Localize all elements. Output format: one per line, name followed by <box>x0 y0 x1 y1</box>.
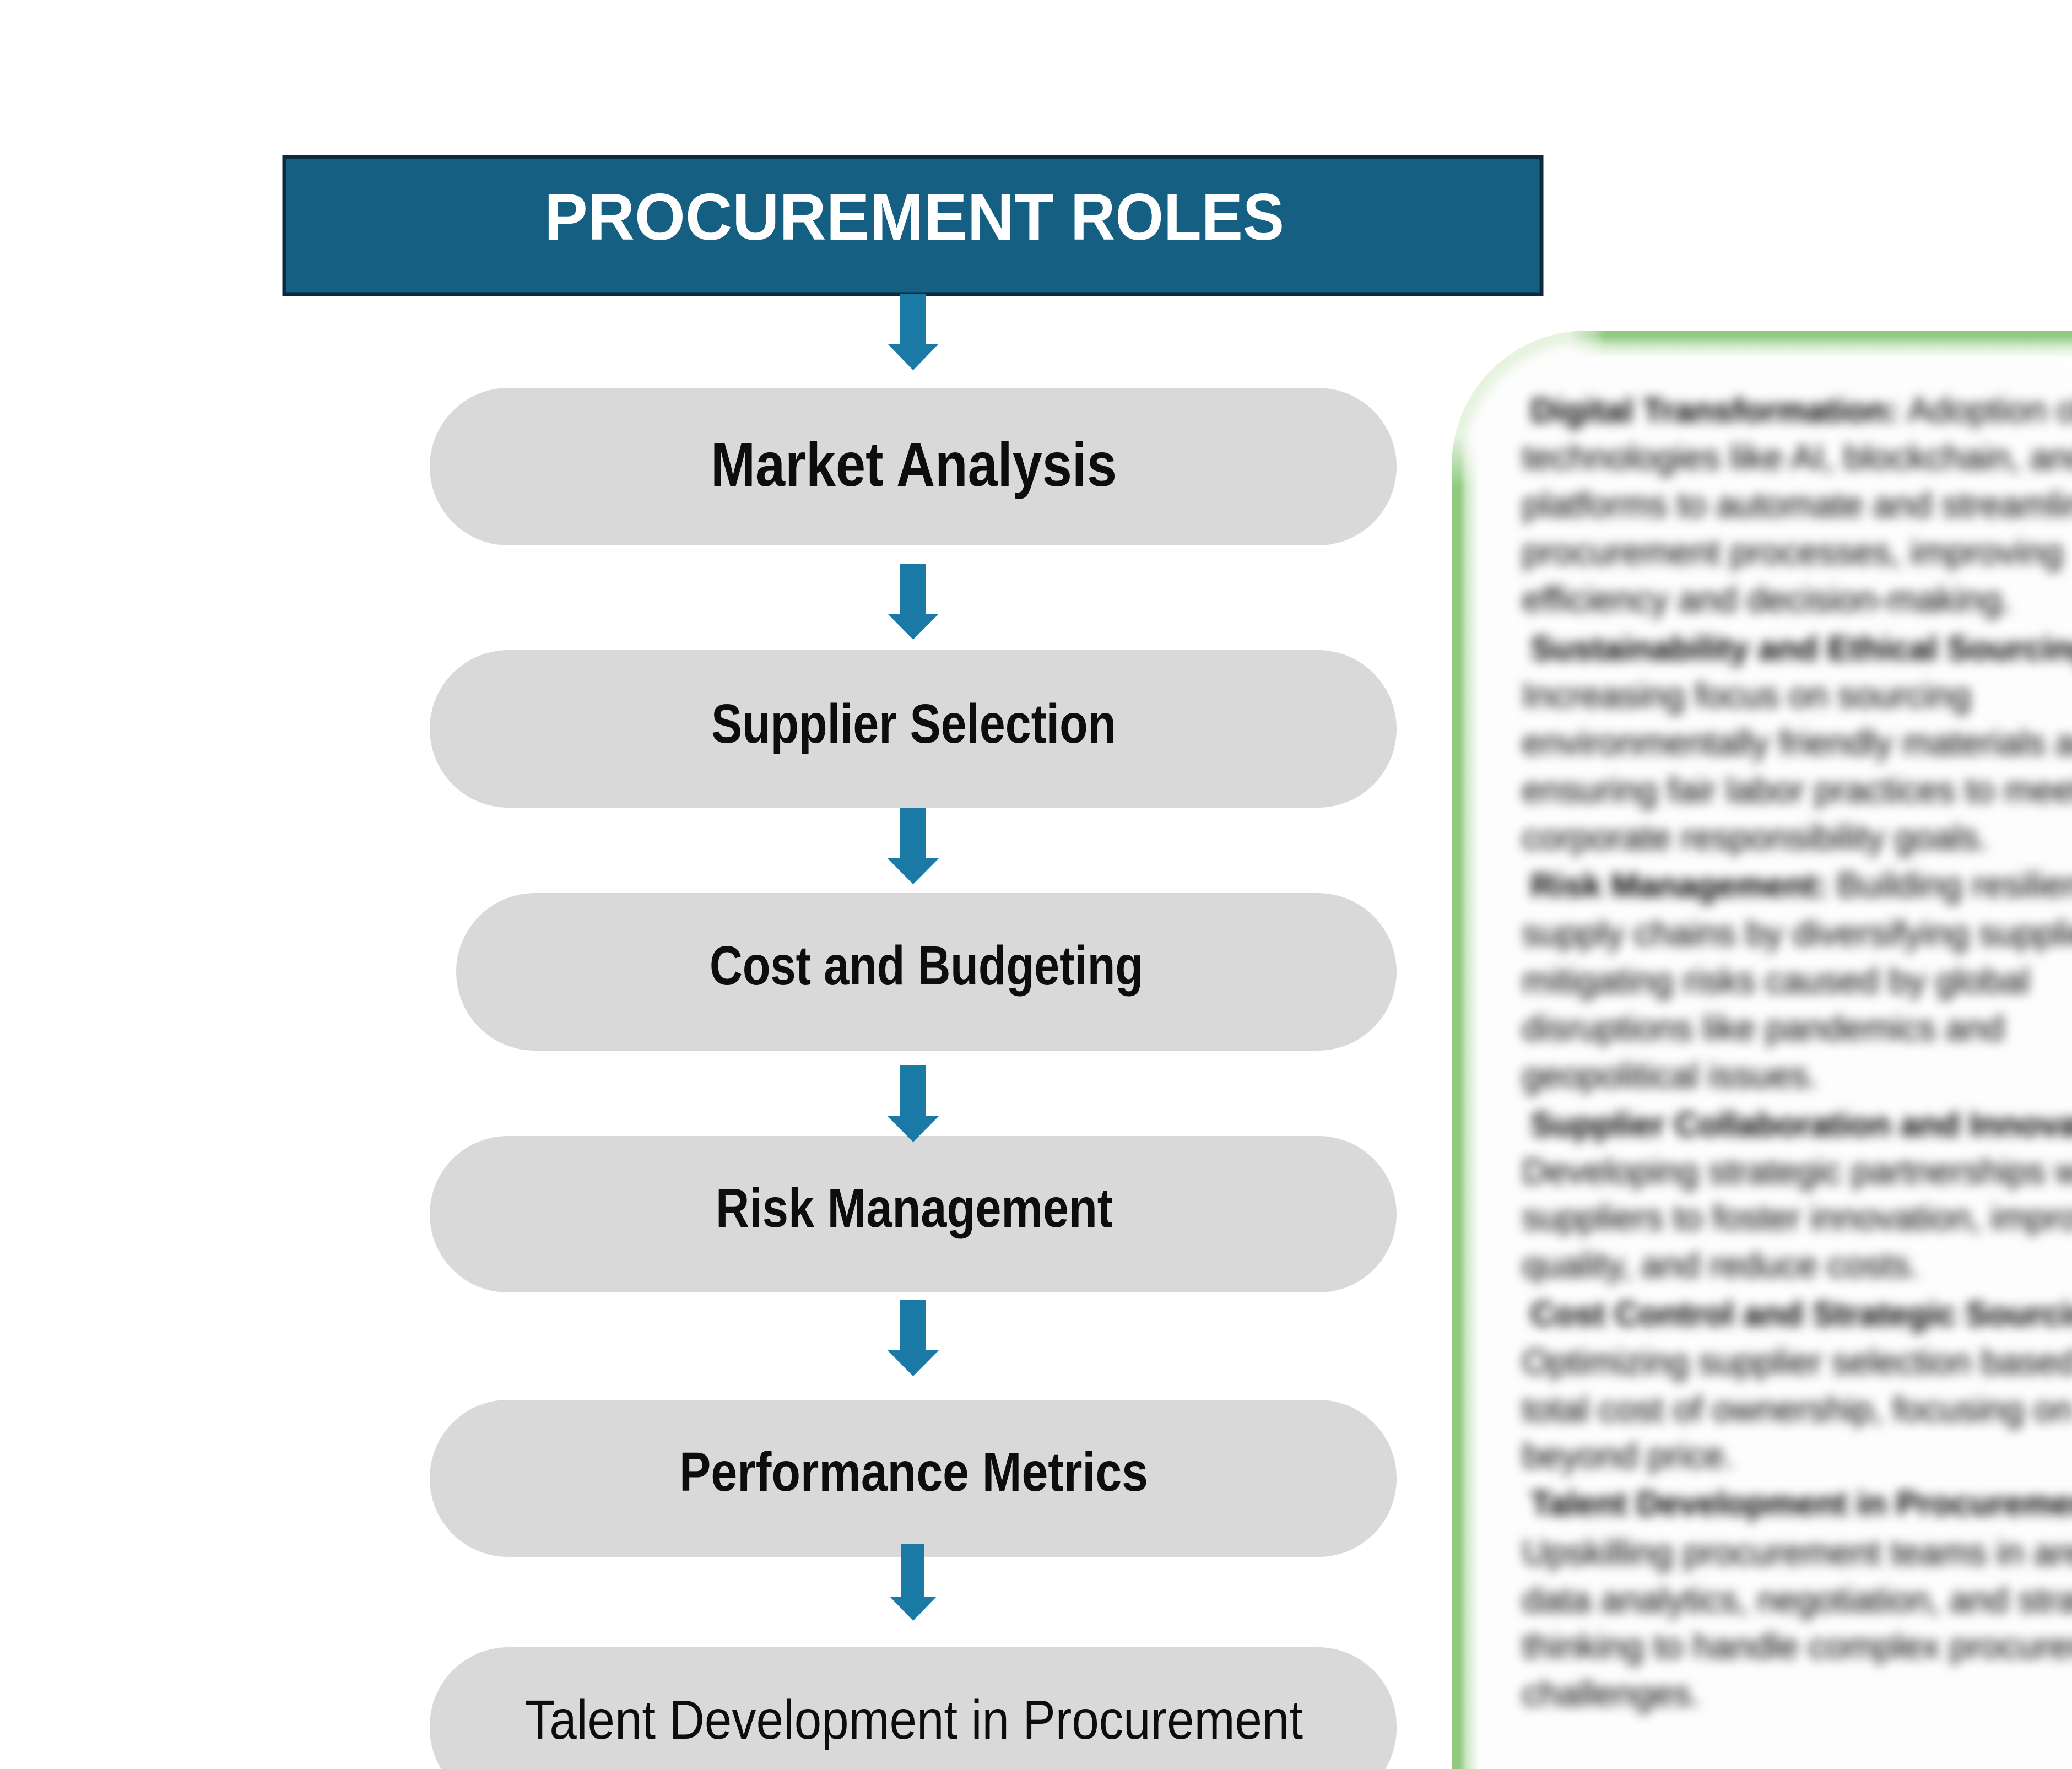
blurred body text: disruptions like pandemics and <box>1522 1008 2004 1048</box>
step pill: Risk Management: Risk Management <box>716 1177 1113 1239</box>
title banner <box>284 157 1541 294</box>
title banner: PROCUREMENT <box>544 180 1054 254</box>
arrow: risk management to performance metrics <box>888 1300 939 1376</box>
arrow: cost and budgeting to risk management <box>888 1065 939 1142</box>
blurred body text <box>1522 390 2072 1713</box>
step pill: Talent Development in Procurement <box>430 1647 1397 1769</box>
panel: blurred procurement trends <box>1452 331 2072 1769</box>
step pill: Performance Metrics <box>430 1400 1397 1557</box>
step pill: Supplier Selection: Supplier Selection <box>711 693 1116 755</box>
step pill: Supplier Selection <box>430 650 1397 808</box>
blurred body text: procurement processes, improving <box>1522 532 2063 572</box>
arrow: supplier selection to cost and budgeting <box>888 808 939 884</box>
step pill: Market Analysis <box>430 388 1397 545</box>
panel background and green border <box>1452 331 2072 1769</box>
step pill: Cost and Budgeting <box>456 893 1397 1051</box>
infographic canvas <box>282 155 2072 1769</box>
blurred body text: mitigating risks caused by global <box>1522 961 2030 1000</box>
step pill: Talent Development in Procurement: Talent Development in Procurement <box>525 1689 1303 1751</box>
arrow: title to market analysis <box>888 294 939 370</box>
blurred body text: corporate responsibility goals. <box>1522 818 1989 857</box>
blurred body text: technologies like AI, blockchain, and <box>1522 437 2072 477</box>
blurred body text: Digital Transformation: Adoption of <box>1530 390 2072 430</box>
blurred body text: Increasing focus on sourcing <box>1522 675 1971 715</box>
blurred body text: quality, and reduce costs. <box>1522 1245 1919 1285</box>
blurred body text: geopolitical issues. <box>1522 1056 1818 1095</box>
arrow: market analysis to supplier selection <box>888 564 939 640</box>
step pill: Performance Metrics: Performance Metrics <box>679 1441 1148 1503</box>
blurred body text: challenges. <box>1522 1674 1701 1713</box>
blurred body text: beyond price. <box>1522 1436 1734 1475</box>
step pill: Market Analysis: Market Analysis <box>711 430 1117 499</box>
blurred body text: ensuring fair labor practices to meet <box>1522 770 2072 810</box>
step pill: Cost and Budgeting: Cost and Budgeting <box>710 935 1143 997</box>
blurred body text: efficiency and decision-making. <box>1522 580 2011 619</box>
arrow: performance metrics to talent development <box>890 1544 937 1621</box>
step pill: Risk Management <box>430 1136 1397 1292</box>
title banner: ROLES <box>1070 180 1284 254</box>
